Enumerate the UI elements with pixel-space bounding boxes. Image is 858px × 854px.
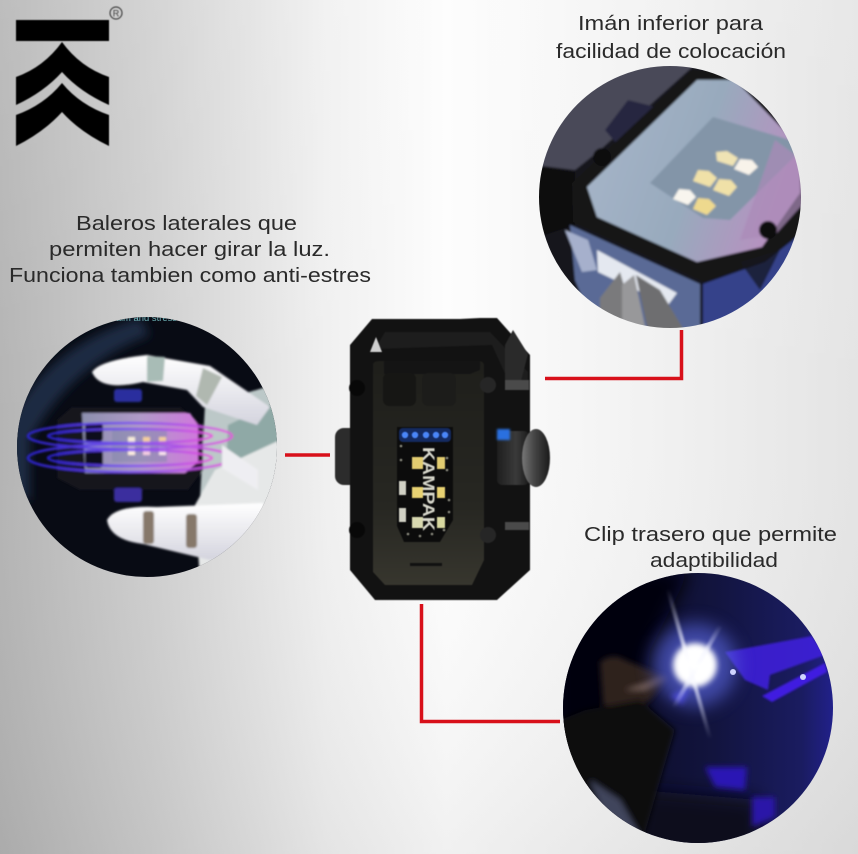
glare xyxy=(653,623,737,707)
person xyxy=(560,656,675,850)
connector: top right xyxy=(545,330,682,378)
base xyxy=(570,225,700,340)
wrist xyxy=(198,386,270,496)
screws xyxy=(349,380,365,396)
device xyxy=(57,407,203,490)
heading: rear clip: Clip trasero que permite xyxy=(584,524,837,546)
side knob left xyxy=(335,428,359,485)
blue indicator LEDs xyxy=(399,428,451,442)
photo circle: night light xyxy=(563,573,833,843)
heading: side bearings xyxy=(9,213,371,287)
heading: bottom magnet: Imán inferior para xyxy=(578,13,764,35)
blue beams xyxy=(725,636,827,702)
connector: left xyxy=(285,453,330,457)
photo circle: magnet detail xyxy=(539,66,801,328)
heading: bottom magnet xyxy=(556,13,786,63)
product: flashlight xyxy=(335,318,550,600)
heading: bottom magnet: facilidad de colocación xyxy=(556,41,786,63)
connector: bottom xyxy=(422,604,560,722)
logo xyxy=(16,7,122,146)
fingers xyxy=(92,355,270,425)
heading: side bearings: Baleros laterales que xyxy=(76,213,297,235)
frame xyxy=(572,105,784,244)
inner panel xyxy=(650,117,798,220)
side bracket xyxy=(505,380,529,390)
solder dots xyxy=(400,445,450,537)
spin rings xyxy=(28,423,232,472)
heading: side bearings: Funciona tambien como anti-estres xyxy=(9,265,371,287)
photo circle: robot hand xyxy=(17,317,277,577)
transparent panel xyxy=(373,361,484,585)
heading: rear clip xyxy=(584,524,837,572)
body xyxy=(350,318,530,600)
side knob right xyxy=(497,429,550,487)
circuit board xyxy=(397,427,453,542)
registered mark: R xyxy=(113,8,120,18)
heading: side bearings: permiten hacer girar la luz. xyxy=(49,239,330,261)
lower notch xyxy=(410,563,442,566)
heading: rear clip: adaptibilidad xyxy=(650,550,778,572)
brand label: KAMPAK xyxy=(419,447,438,532)
LED chips xyxy=(716,151,738,166)
screws xyxy=(599,272,624,318)
buttons xyxy=(383,373,416,406)
caption fragment: calm and stress xyxy=(111,313,178,323)
clip knobs xyxy=(114,389,142,402)
lens xyxy=(587,80,800,262)
LED chips xyxy=(412,457,423,469)
